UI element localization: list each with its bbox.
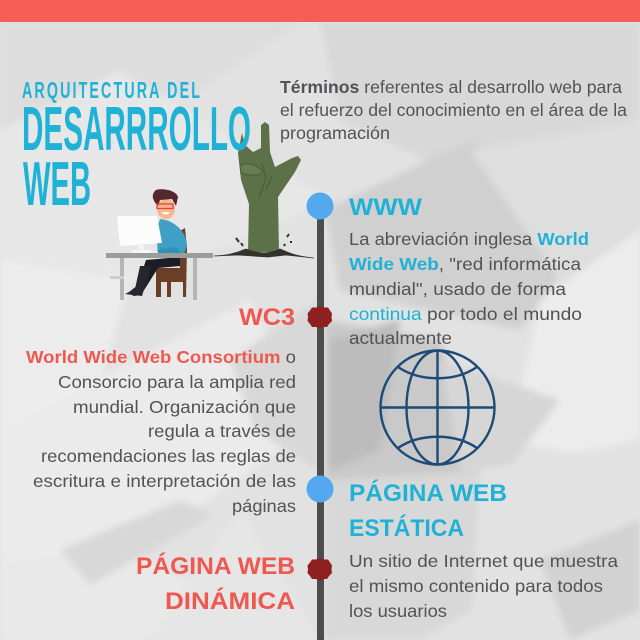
heading: WC3: WC3 [239,304,295,331]
node: WWW [306,192,334,220]
foot [125,266,151,296]
text: WC3 description: Consorcio para la amplia red [58,372,296,392]
intro text [280,77,627,143]
text: WWW description [349,229,589,348]
node: WC3 [308,306,332,328]
text: WWW description: continua por todo el mundo [349,304,582,324]
node: Página web dinámica [308,558,332,580]
text: Página web estática description: Un sitio de Internet que muestra [349,551,618,571]
desk [106,253,213,300]
glasses [157,204,173,208]
icon: globe [380,350,494,464]
title: ARQUITECTURA DEL [22,79,200,104]
heading: Página web dinámica [136,552,295,615]
top bar [0,0,640,22]
text: Página web estática description: el mismo contenido para todos [349,576,603,596]
text: WC3 description: recomendaciones las reglas de [41,446,296,466]
intro text: Términos referentes al desarrollo web para [280,77,622,97]
heading: Página web dinámica: PÁGINA WEB [136,552,295,580]
hair [153,189,178,206]
smile [161,212,170,214]
torso [156,219,187,254]
text: WC3 description: World Wide Web Consortium o [26,347,296,367]
icon: zombie hand [214,122,314,258]
heading: Página web estática: PÁGINA WEB [349,479,507,507]
text: WWW description: Wide Web , "red informática [349,254,581,274]
text: Página web estática description: los usuarios [349,601,447,621]
text: WC3 description: regula a través de [148,421,296,441]
text: WC3 description: escritura e interpretación de las [33,471,296,491]
heading: Página web dinámica: DINÁMICA [165,587,295,615]
node: Página web estática [306,476,334,502]
text: WC3 description: páginas [232,496,296,516]
heading: Página web estática: ESTÁTICA [349,514,464,542]
chair [156,228,187,297]
text: Página web estática description [349,551,618,621]
head [157,199,175,219]
monitor [117,216,162,246]
text: WWW description: actualmente [349,328,452,348]
heading: WWW: WWW [349,194,422,221]
timeline [306,192,334,640]
intro text: el refuerzo del conocimiento en el área de la [280,100,627,120]
intro text: programación [280,123,390,143]
text: DESARRROLLO [22,95,251,164]
text: WC3 description: mundial. Organización que [73,397,296,417]
icon: person at computer [106,189,213,300]
title: WEB [23,150,91,219]
legs [128,257,180,296]
text: WWW description: La abreviación inglesa World [349,229,589,249]
title [22,79,251,219]
text: WC3 description [26,347,296,516]
heading: Página web estática [349,479,507,542]
arm [157,247,182,254]
text: WWW description: mundial", usado de forma [349,279,566,299]
